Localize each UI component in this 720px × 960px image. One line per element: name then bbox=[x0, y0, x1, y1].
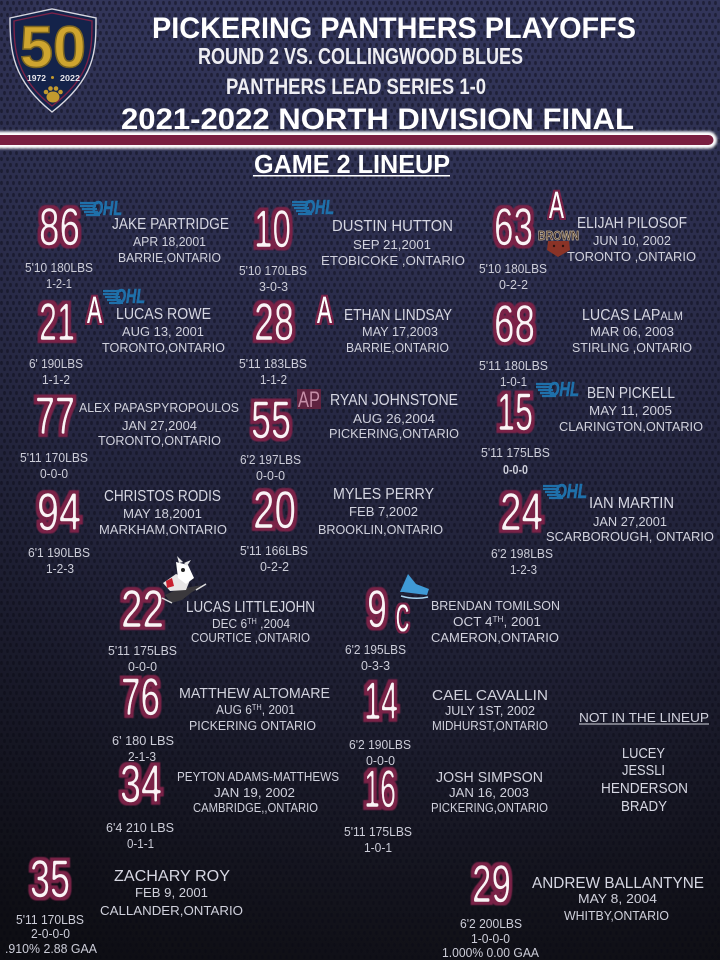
jersey number: 10 bbox=[254, 200, 291, 259]
heading: not in the lineup: NOT IN THE LINEUP bbox=[579, 710, 709, 725]
player details: AUG 13, 2001 bbox=[122, 324, 204, 339]
height, weight and stats: 6'2 200LBS bbox=[460, 917, 522, 931]
jersey number: 24 bbox=[500, 483, 543, 542]
player details: MYLES PERRY bbox=[333, 486, 434, 503]
logo: 50th anniversary shield: 2022 bbox=[60, 74, 81, 83]
player details bbox=[318, 486, 443, 537]
player details bbox=[112, 216, 229, 265]
scratched players list: HENDERSON bbox=[601, 781, 688, 797]
height, weight and stats: 1-2-3 bbox=[510, 563, 537, 577]
player details: , 2001 bbox=[262, 702, 295, 717]
jersey number: 63 bbox=[494, 198, 533, 257]
player details: CALLANDER,ONTARIO bbox=[100, 903, 243, 918]
height, weight and stats: 5'11 170LBS bbox=[16, 913, 84, 927]
height, weight and stats bbox=[29, 357, 83, 387]
height, weight and stats bbox=[349, 738, 411, 768]
alternate captain letters: AP bbox=[298, 387, 320, 412]
player details: TH bbox=[492, 615, 504, 624]
player details: CLARINGTON,ONTARIO bbox=[559, 419, 703, 434]
player details bbox=[79, 400, 239, 448]
height, weight and stats bbox=[5, 913, 98, 956]
height, weight and stats bbox=[112, 734, 174, 764]
height, weight and stats: 5'11 175LBS bbox=[344, 825, 412, 839]
jersey number: 34 bbox=[120, 755, 162, 814]
height, weight and stats: 0-0-0 bbox=[40, 467, 68, 481]
goalie: 35 Zachary Roy bbox=[5, 850, 243, 956]
player details: CAMBRIDGE,,ONTARIO bbox=[193, 800, 318, 815]
height, weight and stats: 1-0-0-0 bbox=[471, 932, 510, 946]
player: 24 Ian Martin bbox=[491, 481, 714, 577]
jersey number: 9 bbox=[367, 580, 387, 639]
jersey number: 14 bbox=[364, 672, 398, 731]
height, weight and stats: 1-0-1 bbox=[364, 841, 392, 855]
player details: TORONTO ,ONTARIO bbox=[567, 249, 696, 264]
jersey number: 68 bbox=[494, 295, 535, 354]
player details: MAY 11, 2005 bbox=[589, 403, 672, 418]
player details: JAN 27,2004 bbox=[122, 418, 197, 433]
jersey number: 76 bbox=[121, 668, 160, 727]
height, weight and stats: 5'10 180LBS bbox=[25, 261, 93, 275]
player details bbox=[102, 306, 225, 355]
height, weight and stats bbox=[106, 821, 174, 851]
jersey number: 29 bbox=[472, 855, 511, 914]
heading: division final: 2021-2022 NORTH DIVISION FINAL bbox=[121, 103, 634, 136]
player details: TH bbox=[252, 703, 262, 712]
player details: JULY 1ST, 2002 bbox=[445, 703, 535, 718]
player details: LUCAS LAPALM bbox=[582, 307, 683, 324]
player details: MAY 8, 2004 bbox=[578, 891, 657, 906]
jersey number: 55 bbox=[251, 391, 291, 450]
player details: LUCAS LITTLEJOHN bbox=[186, 599, 315, 616]
icon: OHL logo: OHL bbox=[555, 481, 587, 503]
height, weight and stats bbox=[481, 446, 550, 477]
height, weight and stats bbox=[108, 644, 177, 674]
height, weight and stats: 6'2 195LBS bbox=[345, 643, 406, 657]
player details: ,2004 bbox=[257, 616, 290, 631]
height, weight and stats: 5'11 166LBS bbox=[240, 544, 308, 558]
height, weight and stats: 1-2-3 bbox=[46, 562, 74, 576]
scratched players list bbox=[601, 746, 688, 815]
player: 20 Myles Perry bbox=[240, 481, 443, 574]
player details: , 2001 bbox=[504, 614, 541, 629]
player: 34 Peyton Adams-Matthews bbox=[106, 755, 339, 851]
height, weight and stats bbox=[479, 359, 548, 389]
player: 16 Josh Simpson bbox=[344, 760, 548, 855]
panel: not in the lineup bbox=[579, 710, 709, 815]
player: 10 Dustin Hutton bbox=[239, 197, 465, 294]
player details: COURTICE ,ONTARIO bbox=[191, 630, 310, 645]
height, weight and stats: 5'11 180LBS bbox=[479, 359, 548, 373]
player details: MAY 17,2003 bbox=[362, 324, 438, 339]
player details: LUCAS ROWE bbox=[116, 306, 211, 323]
height, weight and stats: 5'11 175LBS bbox=[481, 446, 550, 460]
height, weight and stats: 0-3-3 bbox=[361, 659, 390, 673]
scratched players list: BRADY bbox=[621, 799, 667, 815]
player details: SCARBOROUGH, ONTARIO bbox=[546, 529, 714, 544]
icon: Brown University logo bbox=[538, 228, 579, 257]
alternate captain letter: A bbox=[87, 290, 102, 332]
jersey number: 15 bbox=[497, 383, 533, 442]
player details: APR 18,2001 bbox=[133, 234, 206, 249]
height, weight and stats: 1-1-2 bbox=[260, 373, 287, 387]
player details: MAY 18,2001 bbox=[123, 506, 202, 521]
jersey number: 77 bbox=[35, 387, 75, 446]
player details: CAEL CAVALLIN bbox=[432, 688, 548, 704]
player details: PEYTON ADAMS-MATTHEWS bbox=[177, 770, 339, 784]
player details: MIDHURST,ONTARIO bbox=[432, 718, 548, 733]
icon: OHL logo bbox=[536, 379, 579, 401]
player details: AUG 6 bbox=[216, 702, 255, 717]
player details bbox=[432, 688, 548, 733]
icon: OHL logo: OHL bbox=[92, 198, 122, 220]
player details: OCT 4 bbox=[453, 614, 491, 629]
player details bbox=[567, 215, 696, 264]
player details: JAN 16, 2003 bbox=[449, 785, 529, 800]
subtitle: series status: PANTHERS LEAD SERIES 1-0 bbox=[226, 74, 486, 99]
jersey number: 22 bbox=[121, 580, 164, 639]
player details: ETOBICOKE ,ONTARIO bbox=[321, 253, 465, 268]
height, weight and stats: 0-1-1 bbox=[127, 837, 154, 851]
player details: RYAN JOHNSTONE bbox=[330, 392, 458, 409]
player details: TH bbox=[247, 617, 257, 626]
player details: STIRLING ,ONTARIO bbox=[572, 340, 692, 355]
height, weight and stats: 2-0-0-0 bbox=[31, 927, 70, 941]
player details bbox=[431, 598, 560, 645]
player details: JUN 10, 2002 bbox=[593, 233, 671, 248]
player: 68 Lucas LaPalm bbox=[479, 295, 692, 389]
player: 15 Ben Pickell bbox=[481, 379, 703, 477]
height, weight and stats bbox=[20, 451, 88, 481]
player details bbox=[321, 218, 465, 268]
alternate captain letter: A bbox=[549, 185, 564, 227]
player details bbox=[344, 307, 452, 355]
height, weight and stats: 2-1-3 bbox=[128, 750, 156, 764]
player details: ELIJAH PILOSOF bbox=[577, 215, 687, 232]
jersey number: 20 bbox=[253, 481, 296, 540]
player details: AUG 26,2004 bbox=[353, 411, 435, 426]
player details: PICKERING,ONTARIO bbox=[329, 426, 459, 441]
alternate captain letter: A bbox=[317, 290, 332, 332]
player: 63 Elijah Pilosof bbox=[479, 185, 696, 292]
height, weight and stats bbox=[240, 453, 301, 483]
player details: FEB 9, 2001 bbox=[135, 885, 208, 900]
player details: JAN 27,2001 bbox=[593, 514, 667, 529]
heading: game 2 lineup: GAME 2 LINEUP bbox=[254, 149, 450, 179]
player details: FEB 7,2002 bbox=[349, 504, 418, 519]
height, weight and stats: 6' 180 LBS bbox=[112, 734, 174, 748]
height, weight and stats: 6' 190LBS bbox=[29, 357, 83, 371]
goalie: 29 Andrew Ballantyne bbox=[442, 855, 704, 960]
height, weight and stats: 5'11 170LBS bbox=[20, 451, 88, 465]
height, weight and stats: 0-2-2 bbox=[260, 560, 289, 574]
player details: DUSTIN HUTTON bbox=[332, 218, 453, 235]
player details: WHITBY,ONTARIO bbox=[564, 908, 669, 923]
height, weight and stats bbox=[479, 262, 547, 292]
height, weight and stats: 1-0-1 bbox=[500, 375, 527, 389]
height, weight and stats: 0-0-0 bbox=[366, 754, 395, 768]
height, weight and stats bbox=[239, 264, 307, 294]
player: 77 Alex Papaspyropoulos bbox=[20, 387, 239, 481]
height, weight and stats: 5'11 183LBS bbox=[239, 357, 307, 371]
player: 22 Lucas Littlejohn bbox=[108, 556, 315, 674]
player details: JAN 19, 2002 bbox=[214, 785, 295, 800]
player details: PICKERING,ONTARIO bbox=[431, 800, 548, 815]
player: 9 Brendan Tomilson bbox=[345, 574, 560, 673]
player details: BEN PICKELL bbox=[587, 385, 675, 402]
player details: PICKERING ONTARIO bbox=[189, 718, 316, 733]
height, weight and stats: 6'1 190LBS bbox=[28, 546, 90, 560]
player details bbox=[572, 307, 692, 355]
logo: 50th anniversary shield: 50 bbox=[20, 15, 86, 80]
height, weight and stats: 0-0-0 bbox=[256, 469, 285, 483]
icon: OHL logo bbox=[103, 286, 145, 308]
height, weight and stats bbox=[239, 357, 307, 387]
player details: MARKHAM,ONTARIO bbox=[99, 522, 227, 537]
player: 28 Ethan Lindsay bbox=[239, 290, 452, 387]
title: Pickering Panthers Playoffs: PICKERING PANTHERS PLAYOFFS bbox=[152, 12, 636, 45]
player details bbox=[186, 599, 315, 645]
player details: JOSH SIMPSON bbox=[436, 770, 543, 786]
player details bbox=[179, 686, 330, 733]
height, weight and stats: 5'10 170LBS bbox=[239, 264, 307, 278]
jersey number: 94 bbox=[37, 483, 81, 542]
header bar bbox=[0, 132, 717, 148]
player details: JAKE PARTRIDGE bbox=[112, 216, 229, 233]
subtitle: round 2: ROUND 2 VS. COLLINGWOOD BLUES bbox=[198, 43, 523, 69]
player: 76 Matthew Altomare bbox=[112, 668, 330, 764]
player details: MATTHEW ALTOMARE bbox=[179, 686, 330, 702]
player details: TORONTO,ONTARIO bbox=[102, 340, 225, 355]
height, weight and stats: 1-2-1 bbox=[46, 277, 72, 291]
icon: OHL logo: OHL bbox=[304, 197, 334, 219]
player details bbox=[546, 495, 714, 544]
player details: BROOKLIN,ONTARIO bbox=[318, 522, 443, 537]
jersey number: 35 bbox=[30, 850, 70, 909]
icon: OHL logo bbox=[543, 481, 587, 503]
height, weight and stats: 0-0-0 bbox=[128, 660, 157, 674]
player details: BRENDAN TOMILSON bbox=[431, 598, 560, 613]
height, weight and stats bbox=[345, 643, 406, 673]
player details: CAMERON,ONTARIO bbox=[431, 630, 559, 645]
height, weight and stats: 5'11 175LBS bbox=[108, 644, 177, 658]
player details: ETHAN LINDSAY bbox=[344, 307, 452, 324]
height, weight and stats: 3-0-3 bbox=[259, 280, 288, 294]
player details: TORONTO,ONTARIO bbox=[98, 433, 221, 448]
player details: DEC 6 bbox=[212, 616, 250, 631]
player: 9 Brendan Tomilson: C bbox=[396, 598, 409, 640]
jersey number: 16 bbox=[364, 760, 396, 819]
height, weight and stats bbox=[344, 825, 412, 855]
player details bbox=[100, 868, 243, 918]
player details bbox=[177, 770, 339, 815]
player details: MAR 06, 2003 bbox=[590, 324, 674, 339]
icon: QMJHL logo bbox=[400, 574, 429, 598]
icon: Brown University logo: BROWN bbox=[538, 228, 579, 243]
player details bbox=[99, 488, 227, 537]
player: 55 Ryan Johnstone bbox=[240, 387, 459, 483]
player details: SEP 21,2001 bbox=[353, 237, 431, 252]
height, weight and stats bbox=[28, 546, 90, 576]
height, weight and stats: 6'2 190LBS bbox=[349, 738, 411, 752]
jersey number: 86 bbox=[39, 198, 80, 257]
player: 86 Jake Partridge bbox=[25, 198, 229, 291]
logo: 50th anniversary shield: 1972 bbox=[27, 74, 47, 83]
jersey number: 28 bbox=[254, 293, 294, 352]
height, weight and stats: 1.000% 0.00 GAA bbox=[442, 946, 540, 960]
height, weight and stats: .910% 2.88 GAA bbox=[5, 942, 98, 956]
icon: OHL logo bbox=[292, 197, 334, 219]
height, weight and stats: 6'2 197LBS bbox=[240, 453, 301, 467]
height, weight and stats: 5'10 180LBS bbox=[479, 262, 547, 276]
height, weight and stats bbox=[491, 547, 553, 577]
icon: OHL logo: OHL bbox=[115, 286, 145, 308]
player details: ALEX PAPASPYROPOULOS bbox=[79, 400, 239, 415]
icon: IceDogs mascot bbox=[162, 556, 206, 603]
player details: IAN MARTIN bbox=[589, 495, 674, 512]
logo: 50th anniversary shield bbox=[10, 9, 96, 112]
player details: CHRISTOS RODIS bbox=[104, 488, 221, 505]
player details: ZACHARY ROY bbox=[114, 868, 230, 885]
height, weight and stats bbox=[240, 544, 308, 574]
player details: BARRIE,ONTARIO bbox=[346, 340, 449, 355]
height, weight and stats bbox=[442, 917, 540, 960]
jersey number: 21 bbox=[39, 293, 75, 352]
player details bbox=[431, 770, 548, 815]
player details bbox=[329, 392, 459, 441]
height, weight and stats bbox=[25, 261, 93, 291]
player details bbox=[559, 385, 703, 434]
scratched players list: JESSLI bbox=[622, 763, 665, 779]
height, weight and stats: 6'2 198LBS bbox=[491, 547, 553, 561]
height, weight and stats: 0-2-2 bbox=[499, 278, 528, 292]
height, weight and stats: 6'4 210 LBS bbox=[106, 821, 174, 835]
player details: BARRIE,ONTARIO bbox=[118, 250, 221, 265]
height, weight and stats: 1-1-2 bbox=[42, 373, 70, 387]
icon: OHL logo: OHL bbox=[548, 379, 579, 401]
player details bbox=[532, 875, 704, 923]
player: 14 Cael Cavallin bbox=[349, 672, 548, 768]
player details: ANDREW BALLANTYNE bbox=[532, 875, 704, 892]
height, weight and stats: 0-0-0 bbox=[503, 463, 528, 477]
scratched players list: LUCEY bbox=[622, 746, 665, 762]
icon: OHL logo bbox=[80, 198, 122, 220]
player: 94 Christos Rodis bbox=[28, 483, 227, 576]
player: 21 Lucas Rowe bbox=[29, 286, 225, 387]
